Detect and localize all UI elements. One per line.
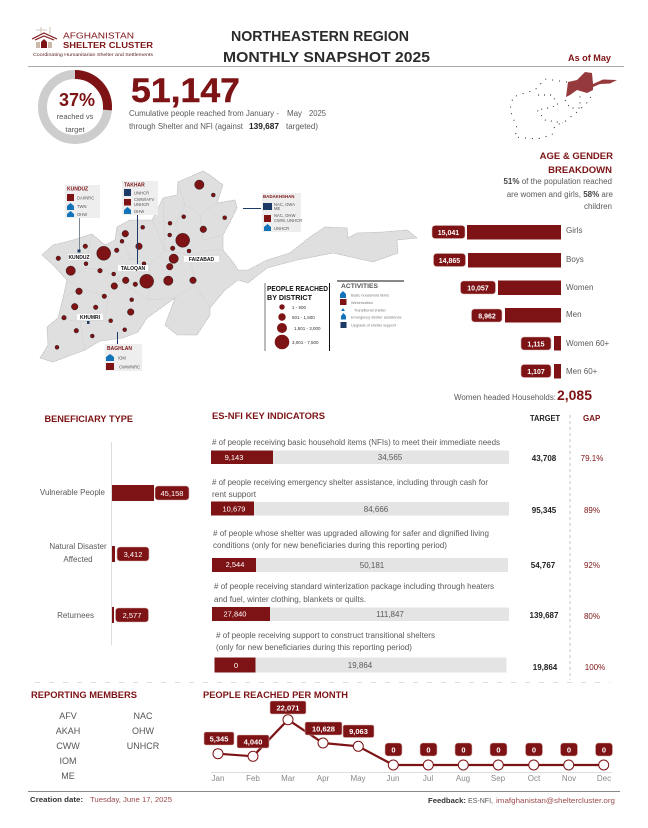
legend: activities: Emergency shelter assistance xyxy=(351,316,402,320)
callout: Badakhshan: UNHCR xyxy=(274,226,289,231)
footer: feedback: Feedback: xyxy=(428,796,466,805)
bar: men: 8,962 xyxy=(478,314,496,320)
indicator: transitional shelters: 0 xyxy=(234,661,238,670)
callout: Badakhshan: CWW, UNHCR xyxy=(274,218,302,223)
indicator: shelter upgrades: # of people whose shelter was upgraded allowing for safer and dignified living xyxy=(213,529,489,538)
headline description: May xyxy=(287,109,302,118)
bar: natural disaster affected: Natural Disaster xyxy=(49,542,107,551)
indicator: transitional shelters: 19,864 xyxy=(348,661,373,670)
list: reporting members: UNHCR xyxy=(127,741,160,751)
month axis labels: Jun xyxy=(387,774,399,783)
indicator: basic household items: # of people receiving basic household items (NFIs) to meet their immediate needs xyxy=(212,438,500,447)
month axis labels: Oct xyxy=(528,774,541,783)
bar: returnees: Returnees xyxy=(57,611,94,620)
callout: Takhar: CWW/AFV xyxy=(134,197,154,202)
indicator: shelter upgrades: 2,544 xyxy=(226,560,244,569)
bar: women: 10,057 xyxy=(467,286,489,292)
donut: 37% reached vs target: 37% xyxy=(59,90,95,110)
indicator: emergency shelter assistance: 89% xyxy=(584,506,600,515)
indicator: shelter upgrades: 54,767 xyxy=(531,561,556,570)
indicator: emergency shelter assistance xyxy=(211,478,600,516)
data labels: 0 xyxy=(532,746,536,754)
callout: Takhar: UNHCR xyxy=(134,202,149,207)
legend: people reached by district xyxy=(264,283,330,351)
headline description xyxy=(129,109,327,131)
month axis labels: Jul xyxy=(423,774,433,783)
headline description: targeted) xyxy=(286,122,318,131)
month axis labels xyxy=(212,774,611,783)
age and gender summary text: are women and girls, 58% are xyxy=(507,190,614,199)
bar: vulnerable people: 45,158 xyxy=(161,489,183,498)
callout: Badakhshan: NAC, OWA xyxy=(274,202,295,207)
column headers: target and gap xyxy=(530,414,601,423)
list: reporting members: NAC xyxy=(133,711,153,721)
indicator: winterization package: and fuel, winter clothing, blankets or quilts. xyxy=(214,595,366,604)
month axis labels: Feb xyxy=(246,774,260,783)
heading: age and gender breakdown xyxy=(540,151,613,176)
line chart: people reached per month xyxy=(204,701,612,783)
list: reporting members: AFV xyxy=(59,711,77,721)
inset map: Afghanistan locator xyxy=(510,72,617,139)
bar: vulnerable people: Vulnerable People xyxy=(40,488,106,497)
indicator: emergency shelter assistance: # of people receiving emergency shelter assistance, including through cash for xyxy=(212,478,488,487)
list: reporting members: AKAH xyxy=(56,726,80,736)
age and gender summary text: children xyxy=(584,202,612,211)
bar: boys xyxy=(434,253,584,268)
bar: women 60+: Women 60+ xyxy=(566,339,610,348)
list: reporting members: IOM xyxy=(60,756,76,766)
month axis labels: Aug xyxy=(456,774,470,783)
bar: men 60+: 1,107 xyxy=(527,369,545,376)
bar: girls: 15,041 xyxy=(438,230,459,237)
headline figure: 51,147 xyxy=(131,72,240,110)
indicator: basic household items: 34,565 xyxy=(378,453,403,462)
callout: Takhar xyxy=(122,181,158,264)
legend: activities: Transitional shelter xyxy=(354,308,387,312)
title: MONTHLY SNAPSHOT 2025 xyxy=(223,49,430,66)
indicator: basic household items xyxy=(211,438,603,464)
bar: natural disaster affected: 3,412 xyxy=(124,550,142,559)
indicator: emergency shelter assistance: 84,666 xyxy=(364,505,389,514)
headline description: Cumulative people reached from January - xyxy=(129,109,279,118)
month axis labels: Mar xyxy=(281,774,295,783)
callout: Takhar: TAKHAR xyxy=(124,182,145,188)
province label: Taloqan: TALOQAN xyxy=(121,266,146,272)
list: reporting members: ME xyxy=(61,771,75,781)
bar: boys: Boys xyxy=(566,255,584,264)
map: northeastern region districts xyxy=(40,171,417,371)
bar: natural disaster affected xyxy=(49,542,149,564)
logo: Afghanistan Shelter Cluster: Coordinating Humanitarian Shelter and Settlements xyxy=(33,52,154,57)
headline description: 139,687 xyxy=(249,122,280,131)
indicator: winterization package: 27,840 xyxy=(224,610,246,618)
district boundaries xyxy=(58,182,223,350)
bar chart: beneficiary type xyxy=(40,442,189,645)
indicator: shelter upgrades: 50,181 xyxy=(360,561,385,570)
bar: boys: 14,865 xyxy=(439,258,460,265)
month axis labels: Sep xyxy=(491,774,506,783)
legend: activities: Winterization xyxy=(351,301,373,305)
heading: people reached per month: PEOPLE REACHED PER MONTH xyxy=(203,690,348,701)
legend: activities: Upgrade of shelter support xyxy=(351,324,397,328)
data labels: 0 xyxy=(391,746,396,754)
donut: 37% reached vs target xyxy=(42,74,108,140)
data labels: 0 xyxy=(496,746,501,754)
callout: Kunduz xyxy=(65,185,100,252)
title xyxy=(223,28,430,66)
heading: age and gender breakdown: AGE & GENDER xyxy=(540,151,613,162)
donut: 37% reached vs target: reached vs xyxy=(57,112,94,121)
callout: Baghlan: CWW/NRC xyxy=(119,364,140,370)
footer: feedback: ES-NFI, xyxy=(468,796,493,805)
indicator: winterization package: 111,847 xyxy=(376,610,404,619)
donut: 37% reached vs target: target xyxy=(65,125,86,134)
legend: people reached by district: 1 - 500 xyxy=(292,305,307,310)
indicator: basic household items: 9,143 xyxy=(225,453,243,462)
data labels: 4,040 xyxy=(244,738,262,746)
column headers: target and gap: GAP xyxy=(583,414,601,423)
footer: feedback: imafghanistan@sheltercluster.org xyxy=(496,796,615,805)
bar: men: Men xyxy=(566,310,582,319)
list: reporting members: CWW xyxy=(56,741,80,751)
list: reporting members xyxy=(56,711,160,781)
women headed households: 2,085 xyxy=(557,387,592,403)
bar: men xyxy=(472,308,582,322)
legend: activities: Basic household items xyxy=(351,294,389,298)
legend: people reached by district: BY DISTRICT xyxy=(267,295,313,302)
heading: age and gender breakdown: BREAKDOWN xyxy=(548,165,612,176)
bar chart: age and gender xyxy=(432,225,610,378)
heading: beneficiary type: BENEFICIARY TYPE xyxy=(44,414,133,425)
legend: activities xyxy=(337,280,404,328)
callout: Badakhshan: BADAKHSHAN xyxy=(263,194,294,199)
indicator: transitional shelters: 19,864 xyxy=(533,663,558,672)
province label: Kunduz: KUNDUZ xyxy=(68,255,90,261)
title: NORTHEASTERN REGION xyxy=(231,28,409,45)
bar: returnees: 2,577 xyxy=(123,611,141,620)
callout: Kunduz: KUNDUZ xyxy=(67,186,88,192)
women headed households: Women headed Households: xyxy=(454,393,556,402)
data labels: 5,345 xyxy=(210,734,228,744)
bar: women: Women xyxy=(566,283,593,292)
bar: vulnerable people xyxy=(40,485,189,501)
headline description: 2025 xyxy=(309,109,327,118)
callout: Kunduz: OHW xyxy=(77,212,87,217)
province label: Pul-e Khumri: KHUMRI xyxy=(80,315,101,321)
region outline xyxy=(40,171,417,362)
month axis labels: Nov xyxy=(562,774,576,783)
callout: Takhar: OHW xyxy=(134,209,144,214)
legend: people reached by district: 1,501 - 3,000 xyxy=(294,326,321,331)
province label: Faizabad: FAIZABAD xyxy=(189,257,215,263)
logo: Afghanistan Shelter Cluster xyxy=(32,27,154,57)
bar: men 60+ xyxy=(521,364,598,378)
age and gender summary text xyxy=(503,177,614,211)
heading: ES-NFI key indicators: ES-NFI KEY INDICATORS xyxy=(212,411,325,422)
indicator: transitional shelters: # of people receiving support to construct transitional shelters xyxy=(216,631,435,640)
province label: Faizabad xyxy=(184,256,219,263)
as of date: As of May xyxy=(568,53,611,63)
month axis labels: Jan xyxy=(212,774,224,783)
callout: Kunduz: TWN xyxy=(77,204,87,209)
month axis labels: Dec xyxy=(597,774,611,783)
callout: Baghlan: BAGHLAN xyxy=(107,346,132,352)
heading: reporting members: REPORTING MEMBERS xyxy=(31,690,137,701)
data labels: 0 xyxy=(602,746,606,754)
month axis labels: Apr xyxy=(317,774,330,783)
district bubbles xyxy=(55,180,227,349)
footer: feedback xyxy=(428,796,615,805)
bar: women 60+: 1,115 xyxy=(527,342,545,348)
callout: Baghlan: IOM xyxy=(118,356,126,360)
logo: Afghanistan Shelter Cluster: AFGHANISTAN xyxy=(63,32,134,40)
data labels: 0 xyxy=(426,746,431,754)
legend: people reached by district: PEOPLE REACHED xyxy=(267,286,328,293)
women headed households xyxy=(454,387,592,403)
bar: women 60+ xyxy=(521,336,610,350)
indicator: emergency shelter assistance: 95,345 xyxy=(532,506,557,515)
data labels xyxy=(204,701,612,756)
indicator: basic household items: 43,708 xyxy=(532,454,557,463)
indicator: shelter upgrades: 92% xyxy=(584,561,600,570)
indicator: basic household items: 79.1% xyxy=(581,454,603,463)
indicator: winterization package xyxy=(212,582,600,621)
callout: Baghlan xyxy=(105,332,142,371)
bar: returnees xyxy=(57,607,148,623)
indicator: shelter upgrades xyxy=(212,529,600,572)
logo: Afghanistan Shelter Cluster: SHELTER CLUSTER xyxy=(63,41,153,50)
indicator: transitional shelters: (only for new beneficiaries during this reporting period) xyxy=(216,643,412,652)
month axis labels: May xyxy=(350,774,366,783)
bar: girls xyxy=(432,225,582,240)
headline description: through Shelter and NFI (against xyxy=(129,122,244,131)
indicator: winterization package: 139,687 xyxy=(530,611,559,620)
callout: Badakhshan: NAC, OHW xyxy=(274,213,295,218)
legend: activities: ACTIVITIES xyxy=(341,283,379,290)
age and gender summary text: 51% of the population reached xyxy=(503,177,612,186)
bar: girls: Girls xyxy=(566,226,582,235)
legend: people reached by district: 501 - 1,500 xyxy=(292,315,315,320)
indicator: transitional shelters: 100% xyxy=(585,663,605,672)
column headers: target and gap: TARGET xyxy=(530,414,560,423)
data labels: 22,071 xyxy=(277,704,299,712)
callout: Kunduz: DAI/NRC xyxy=(77,196,94,200)
callout: Takhar: UNHCR xyxy=(134,190,149,196)
indicator: winterization package: # of people receiving standard winterization package including through heaters xyxy=(214,582,494,591)
data labels: 9,063 xyxy=(349,727,368,736)
callout: Badakhshan: ME xyxy=(274,206,280,211)
province label: Pul-e Khumri xyxy=(77,314,103,321)
data labels: 0 xyxy=(567,746,571,754)
callout: Badakhshan xyxy=(243,193,302,232)
legend: people reached by district: 3,001 - 7,500 xyxy=(292,340,319,345)
indicator: emergency shelter assistance: 10,679 xyxy=(223,504,245,514)
footer: creation date: Tuesday, June 17, 2025 xyxy=(90,795,172,804)
indicator: shelter upgrades: conditions (only for new beneficiaries during this reporting period) xyxy=(213,541,447,550)
footer: creation date xyxy=(30,795,172,804)
indicator: transitional shelters xyxy=(214,631,605,672)
indicator: winterization package: 80% xyxy=(584,612,600,621)
footer: creation date: Creation date: xyxy=(30,795,83,804)
data labels: 10,628 xyxy=(312,724,335,734)
bar: natural disaster affected: Affected xyxy=(63,555,93,564)
data labels: 0 xyxy=(461,746,466,754)
indicator: emergency shelter assistance: rent support xyxy=(212,490,257,499)
bar: men 60+: Men 60+ xyxy=(566,367,598,376)
bar: women xyxy=(460,280,593,295)
list: reporting members: OHW xyxy=(132,726,154,736)
